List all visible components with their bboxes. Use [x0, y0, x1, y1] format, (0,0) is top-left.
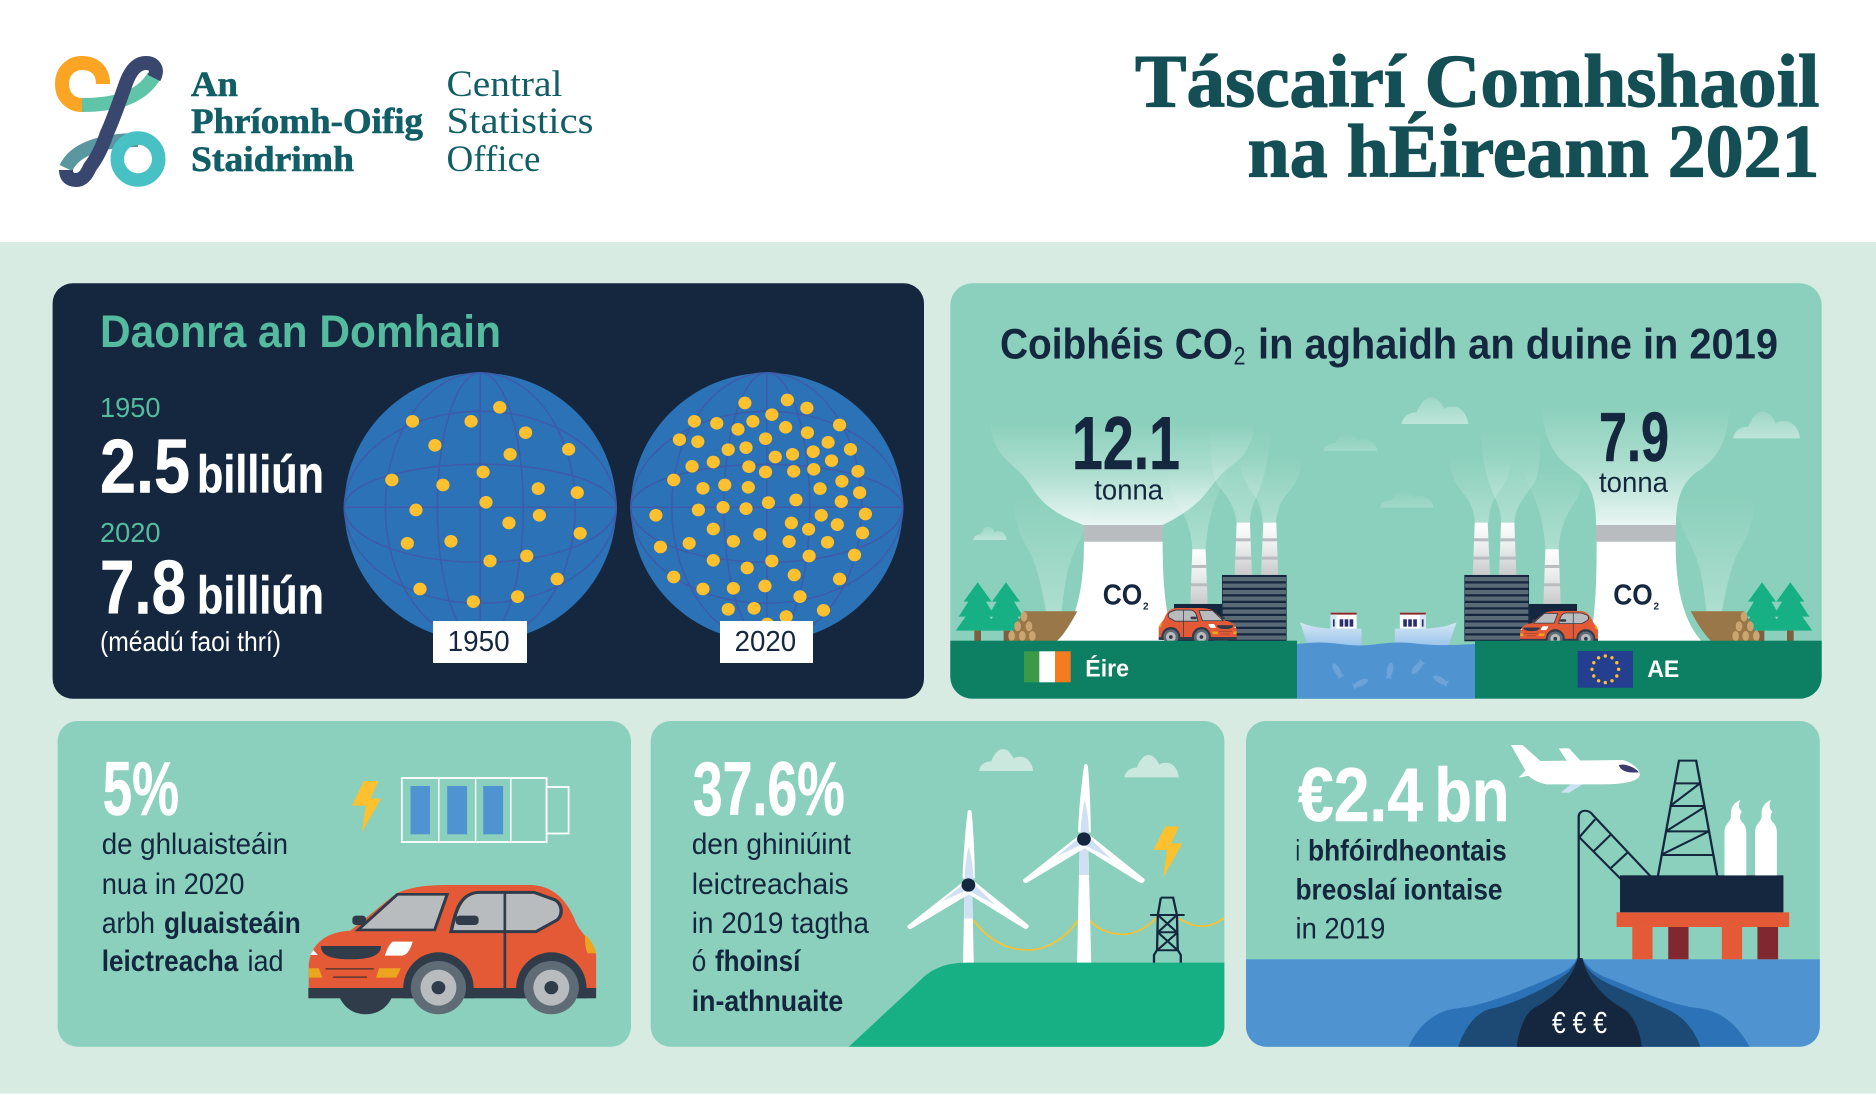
- stat: €2.4 bn: €2.4: [1298, 753, 1423, 838]
- tower label: CO2 Ireland: CO: [1103, 579, 1142, 611]
- wind turbine small: [907, 810, 1029, 963]
- text: renewable description: in 2019 tagtha: [692, 907, 869, 940]
- stat: 1950 population: billiún: [197, 446, 324, 505]
- text: subsidies description: bhfóirdheontais: [1308, 835, 1507, 868]
- text: electric cars description: gluaisteáin: [164, 907, 301, 940]
- flag: Ireland: [1024, 651, 1071, 682]
- icon: battery: [402, 778, 569, 842]
- left scene: Ireland: [956, 422, 1377, 647]
- tower label: CO2 Ireland: 2: [1143, 602, 1149, 612]
- tower label: CO2 EU: CO: [1613, 579, 1653, 611]
- stat: 1950 population: 1950: [100, 392, 160, 423]
- stat: 1950 population: [100, 392, 324, 510]
- text: subsidies description: in 2019: [1296, 912, 1385, 945]
- clouds: [979, 749, 1179, 777]
- text: renewable description: ó: [692, 945, 706, 978]
- logo text: English: Office: [446, 139, 540, 180]
- text: subsidies description: breoslaí iontaise: [1296, 873, 1502, 906]
- stat: €2.4 bn: bn: [1434, 753, 1509, 838]
- power lines: [973, 917, 1225, 950]
- panel: world population: [53, 283, 924, 699]
- logo text: Irish: Phríomh-Oifig: [191, 101, 423, 141]
- illustration: wind farm: [849, 749, 1225, 1047]
- heading: world population: Daonra an Domhain: [100, 306, 501, 357]
- stat: 2020 population: 7.8: [100, 546, 186, 631]
- CO2 scene illustration: [950, 397, 1822, 700]
- icon: lightning bolt: [352, 781, 381, 832]
- label: Éire: Éire: [1085, 655, 1129, 683]
- pipe and crane: [1579, 811, 1650, 959]
- text: renewable description: in-athnuaite: [692, 985, 843, 1018]
- stat: 1950 population: 2.5: [100, 425, 190, 510]
- text: subsidies description: i: [1296, 835, 1300, 868]
- text: renewable description: [692, 828, 869, 1018]
- illustration: oil rig, sea and plane: [1244, 745, 1822, 1048]
- heading: CO2 per person: 2: [1234, 342, 1246, 370]
- heading: CO2 per person: in aghaidh an duine in 2019: [1258, 320, 1778, 368]
- heading: CO2 per person: Coibhéis CO: [1000, 320, 1233, 368]
- stat: 37.6%: 37.6%: [693, 747, 845, 832]
- text: electric cars description: arbh: [102, 907, 155, 940]
- water with fish: [1297, 642, 1475, 700]
- text: electric cars description: nua in 2020: [102, 868, 244, 901]
- wind turbine large: [1023, 764, 1145, 963]
- stat: Ireland 12.1 tonnes: 12.1: [1072, 401, 1180, 485]
- text: electric cars description: [102, 828, 301, 978]
- globe 2020: 2020: [735, 626, 796, 658]
- heading: CO2 per person: [1000, 320, 1778, 370]
- stat: Ireland 12.1 tonnes: [1072, 401, 1180, 506]
- logo text: Irish: [191, 64, 423, 179]
- ground: Ireland: [950, 641, 1297, 699]
- plane: [1511, 745, 1640, 793]
- panel: fossil fuel subsidies: [1244, 721, 1822, 1048]
- title: na hÉireann 2021: [1248, 111, 1820, 194]
- text: renewable description: fhoinsí: [715, 945, 802, 978]
- stat: EU 7.9 tonnes: 7.9: [1599, 398, 1669, 476]
- green hill: [849, 963, 1225, 1047]
- platform legs and deck: [1617, 875, 1789, 959]
- logo text: Irish: Staidrimh: [191, 139, 354, 179]
- ground: EU: [1475, 641, 1822, 699]
- flag: EU: [1578, 651, 1633, 688]
- stat: 2020 population: 2020: [100, 517, 160, 548]
- stat: EU 7.9 tonnes: [1599, 398, 1669, 499]
- pylon: [1150, 898, 1185, 963]
- text: subsidies description: [1296, 835, 1507, 945]
- logo text: English: [446, 64, 594, 180]
- stat: 2020 population: billiún: [197, 567, 324, 626]
- logo text: English: Central: [446, 64, 562, 105]
- tower label: CO2 EU: 2: [1654, 602, 1660, 612]
- text: renewable description: den ghiniúint: [692, 828, 852, 861]
- sea: [1244, 959, 1822, 1048]
- logo text: English: Statistics: [446, 101, 594, 142]
- illustration: red car: [308, 885, 596, 1014]
- stat: €2.4 bn: [1298, 753, 1509, 838]
- stat: 5%: 5%: [103, 747, 179, 832]
- stat: 2020 population: (méadú faoi thrí): [100, 626, 281, 657]
- stat: Ireland 12.1 tonnes: tonna: [1094, 474, 1164, 506]
- oil reservoir: [1408, 958, 1750, 1047]
- logo mark: [62, 63, 159, 180]
- panel: renewable electricity: [651, 721, 1225, 1047]
- panel: CO2 per person: [950, 283, 1822, 700]
- panel: electric cars: [58, 721, 631, 1047]
- page background: [0, 242, 1876, 1094]
- title: Táscairí Comhshaoil: [1135, 41, 1820, 124]
- small car: EU: [1520, 611, 1598, 641]
- stat: EU 7.9 tonnes: tonna: [1599, 467, 1669, 499]
- text: electric cars description: de ghluaisteáin: [102, 828, 288, 861]
- globe 1950: 1950: [448, 626, 510, 658]
- globe 1950: [344, 373, 616, 663]
- text: electric cars description: leictreacha: [102, 945, 239, 978]
- stat: 2020 population: [100, 517, 324, 657]
- right scene: EU: [1380, 397, 1812, 647]
- logo text: Irish: An: [191, 64, 238, 104]
- text: electric cars description: iad: [248, 945, 284, 978]
- globe 2020: [631, 373, 903, 663]
- icon: lightning bolt: [1153, 826, 1182, 878]
- small car: Ireland: [1159, 608, 1237, 644]
- title: [1135, 41, 1820, 194]
- gas tanks: [1724, 800, 1777, 875]
- logo: [62, 63, 594, 180]
- derrick: [1658, 761, 1717, 876]
- label: AE: AE: [1647, 656, 1679, 683]
- label: euro symbols: € € €: [1552, 1005, 1607, 1040]
- text: renewable description: leictreachais: [692, 868, 849, 901]
